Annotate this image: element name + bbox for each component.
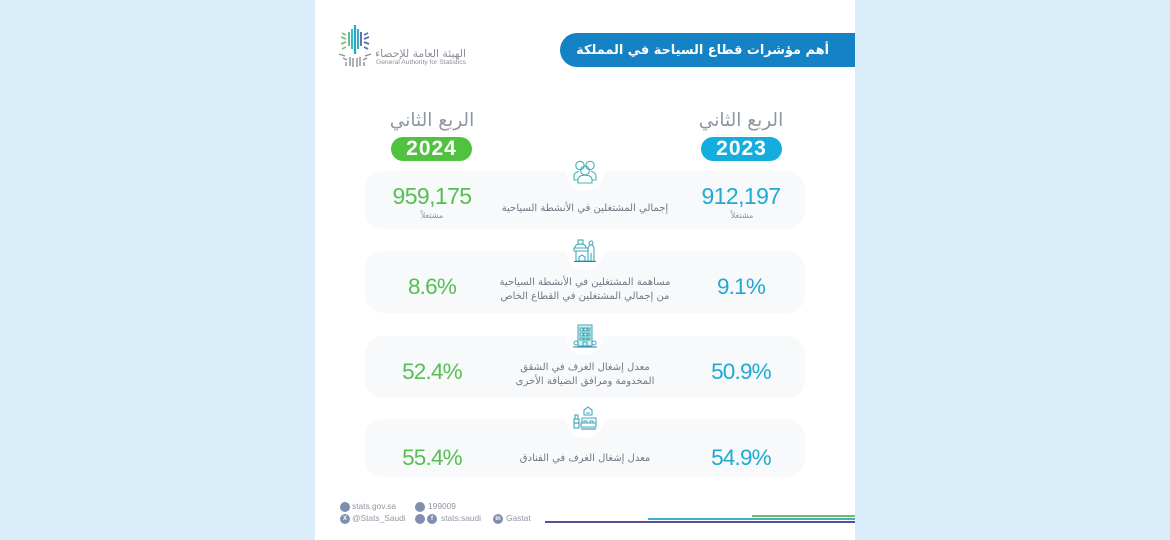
- unit 2024: مشتغلاً: [421, 211, 443, 220]
- value: 912,197 employees: 912,197: [702, 183, 780, 209]
- icon backdrop: people: [566, 153, 604, 191]
- logo mark: [338, 25, 372, 67]
- label: share of employees: من إجمالي المشتغلين في القطاع الخاص: [500, 291, 669, 302]
- icon backdrop: building: [566, 317, 604, 355]
- year pill 2024: 2024: [406, 137, 457, 160]
- logo: General Authority for Statistics: [338, 25, 466, 67]
- icon backdrop: hotel bed: [566, 400, 604, 438]
- quarter label 2024: الربع الثاني: [390, 110, 474, 131]
- white page panel: [315, 0, 855, 540]
- value: 55.4%: 55.4%: [402, 445, 462, 470]
- unit 2023: مشتغلاً: [731, 211, 753, 220]
- footer contacts: [340, 501, 531, 524]
- year pill 2024: [391, 137, 472, 161]
- title banner: [560, 33, 855, 67]
- icon: people: [573, 160, 597, 184]
- panel: share of private sector employees: [365, 251, 805, 313]
- X handle: X: [343, 516, 347, 522]
- value: 54.9%: 54.9%: [711, 445, 771, 470]
- website: stats.gov.sa: [352, 501, 396, 511]
- value: 52.4%: 52.4%: [402, 359, 462, 384]
- label: total employees: إجمالي المشتغلين في الأنشطة السياحية: [502, 203, 668, 214]
- icon: building: [573, 324, 597, 348]
- linkedin: [493, 513, 531, 524]
- value: 9.1%: 9.1%: [717, 274, 765, 299]
- quarter label 2023: الربع الثاني: [699, 110, 783, 131]
- instagram and facebook: [415, 513, 481, 524]
- footer accent lines: [545, 515, 855, 523]
- phone: 199009: [428, 501, 456, 511]
- panel: hotel occupancy: [365, 419, 805, 477]
- value: 50.9%: 50.9%: [711, 359, 771, 384]
- value: 8.6%: 8.6%: [408, 274, 456, 299]
- instagram and facebook: f: [431, 516, 433, 522]
- value: 959,175 employees: 959,175: [393, 183, 471, 209]
- column header 2023: [699, 110, 783, 161]
- column header 2024: [390, 110, 474, 161]
- X handle: @Stats_Saudi: [352, 513, 406, 523]
- title text: أهم مؤشرات قطاع السياحة في المملكة: [576, 43, 829, 58]
- year pill 2023: [701, 137, 782, 161]
- label: share of employees: مساهمة المشتغلين في الأنشطة السياحية: [499, 277, 670, 288]
- instagram and facebook: stats.saudi: [441, 513, 481, 523]
- year pill 2023: 2023: [716, 137, 767, 160]
- logo English name: General Authority for Statistics: [376, 59, 466, 66]
- logo Arabic name: الهيئة العامة للإحصاء: [375, 47, 466, 60]
- icon backdrop: reception: [566, 232, 604, 270]
- linkedin: Gastat: [506, 513, 531, 523]
- label: hotel occupancy: معدل إشغال الغرف في الفنادق: [520, 453, 650, 464]
- icon: reception desk: [573, 239, 596, 262]
- linkedin: in: [495, 516, 501, 522]
- phone: [415, 501, 456, 512]
- label: share of employees: [499, 276, 670, 302]
- icon: hotel bed and luggage: [573, 406, 597, 430]
- panel: occupancy in serviced apartments: [365, 336, 805, 398]
- label: apartment occupancy: معدل إشغال الغرف في الشقق: [520, 362, 650, 373]
- label: apartment occupancy: المخدومة ومرافق الضيافة الأخرى: [516, 376, 654, 387]
- panel: total tourism employees: [365, 171, 805, 229]
- label: apartment occupancy: [516, 362, 654, 387]
